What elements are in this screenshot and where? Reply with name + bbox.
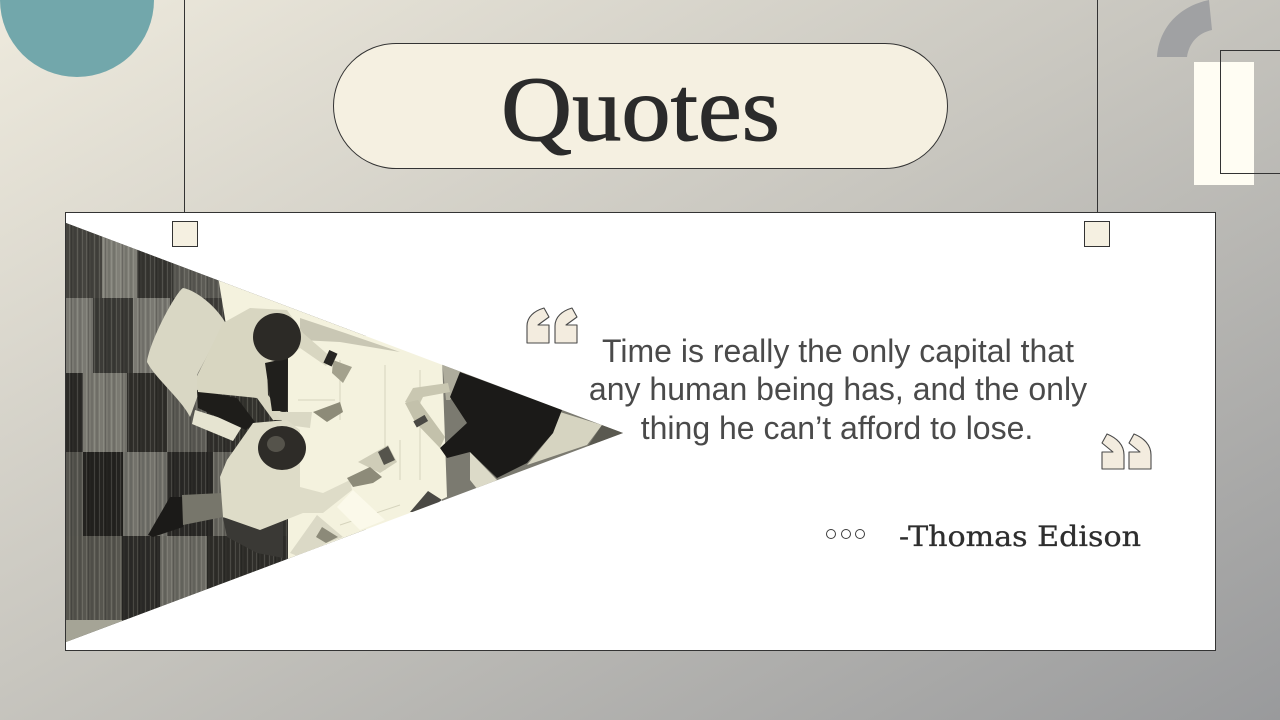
woman bbox=[405, 372, 625, 478]
title pill bbox=[334, 44, 948, 168]
left hanger square bbox=[172, 222, 198, 246]
attribution: -Thomas Edison bbox=[899, 520, 1141, 553]
left hanging line bbox=[184, 0, 186, 221]
right hanger square bbox=[1084, 222, 1110, 246]
man one bbox=[147, 288, 352, 441]
decorative teal circle bbox=[0, 0, 154, 77]
opening quote icon bbox=[527, 308, 577, 343]
quote text bbox=[589, 333, 1087, 446]
decorative cream rectangle bbox=[1194, 62, 1254, 185]
decorative outlined rectangle bbox=[1220, 50, 1280, 174]
photo: meeting seen from above, clipped to triangle bbox=[66, 220, 632, 645]
carpet bbox=[66, 220, 366, 645]
title: Quotes bbox=[501, 58, 780, 160]
three small circles bbox=[826, 530, 864, 538]
floor and table bbox=[217, 270, 632, 565]
man two bbox=[148, 420, 397, 558]
quote text: any human being has, and the only bbox=[589, 371, 1087, 407]
quote panel bbox=[66, 212, 1216, 650]
quote text: thing he can’t afford to lose. bbox=[641, 410, 1033, 446]
decorative grey arc bbox=[1157, 0, 1212, 57]
quote text: Time is really the only capital that bbox=[602, 333, 1074, 369]
right hanging line bbox=[1096, 0, 1098, 221]
closing quote icon bbox=[1102, 434, 1151, 469]
